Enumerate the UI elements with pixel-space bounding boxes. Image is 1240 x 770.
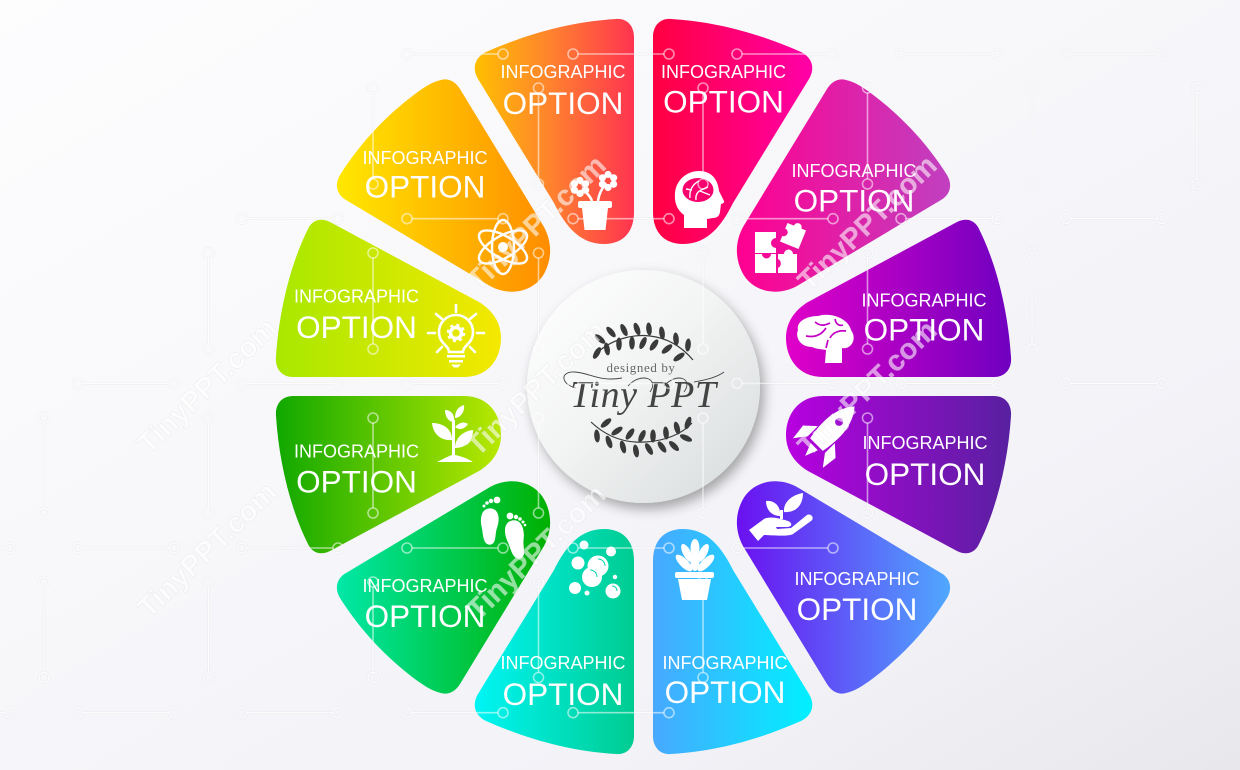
panel: yellow option segment xyxy=(337,79,550,292)
icon: bubbles xyxy=(569,540,620,598)
label: green segment: INFOGRAPHIC xyxy=(294,442,419,462)
label: green segment: OPTION xyxy=(296,464,417,500)
label: blue-violet segment: INFOGRAPHIC xyxy=(794,569,920,589)
panel: lime option segment xyxy=(276,220,501,377)
icon: atom xyxy=(474,220,532,274)
icon: light bulb with gear xyxy=(428,305,484,368)
label: red segment: INFOGRAPHIC xyxy=(661,62,786,82)
label: red segment xyxy=(661,62,786,120)
watermarks: TinyPPT.com xyxy=(461,315,613,463)
icon: head with brain xyxy=(675,171,724,228)
panel: sky blue option segment xyxy=(653,529,812,754)
watermarks: TinyPPT.com xyxy=(461,479,613,627)
label: lime segment: INFOGRAPHIC xyxy=(294,287,419,307)
icon: rocket xyxy=(789,390,871,472)
label: blue-violet segment: OPTION xyxy=(797,591,917,627)
panel: orange option segment xyxy=(475,19,634,244)
label: violet segment: OPTION xyxy=(865,456,985,492)
label: green segment xyxy=(294,442,419,500)
label: purple segment: INFOGRAPHIC xyxy=(861,291,987,311)
label: sky blue segment: INFOGRAPHIC xyxy=(662,653,788,673)
label: emerald segment: OPTION xyxy=(365,598,485,634)
watermarks xyxy=(132,150,944,627)
icon: puzzle pieces xyxy=(755,219,808,273)
label: lime segment: OPTION xyxy=(296,309,417,345)
panel: centre logo disc xyxy=(527,270,760,503)
label: lime segment xyxy=(294,287,419,345)
label: purple segment xyxy=(861,291,987,348)
label: magenta segment: OPTION xyxy=(794,182,914,218)
icon: hand holding plant xyxy=(749,493,813,541)
panel: teal option segment xyxy=(475,529,634,754)
label: yellow segment: INFOGRAPHIC xyxy=(362,148,488,168)
panel: purple option segment xyxy=(786,220,1011,377)
watermarks: TinyPPT.com xyxy=(792,315,944,463)
label: sky blue segment xyxy=(662,653,788,710)
icon: sprout xyxy=(432,405,473,462)
label: red segment: OPTION xyxy=(663,84,784,120)
watermarks: TinyPPT.com xyxy=(132,477,284,625)
label: purple segment: OPTION xyxy=(864,312,984,348)
label: magenta segment: INFOGRAPHIC xyxy=(791,161,917,181)
watermarks: TinyPPT.com xyxy=(792,150,944,298)
label: emerald segment: INFOGRAPHIC xyxy=(362,576,488,596)
panel: emerald option segment xyxy=(337,481,550,694)
label: emerald segment xyxy=(362,576,488,634)
label: blue-violet segment xyxy=(794,569,920,627)
label: violet segment: INFOGRAPHIC xyxy=(862,433,988,453)
icon: succulent in pot xyxy=(673,539,717,600)
label: teal segment: OPTION xyxy=(503,676,623,712)
panel: blue-violet option segment xyxy=(737,481,950,694)
icon: flower pot xyxy=(571,171,617,230)
label: teal segment: INFOGRAPHIC xyxy=(500,653,626,673)
label: orange segment xyxy=(500,62,626,121)
label: orange segment: OPTION xyxy=(503,85,623,121)
panel: violet option segment xyxy=(786,390,1011,553)
watermarks: TinyPPT.com xyxy=(461,150,613,298)
icon: footprints xyxy=(481,497,529,561)
label: magenta segment xyxy=(791,161,917,218)
icon: brain xyxy=(797,315,854,363)
panel: magenta option segment xyxy=(737,79,950,292)
label: orange segment: INFOGRAPHIC xyxy=(500,62,626,82)
label: yellow segment: OPTION xyxy=(365,169,485,205)
label: yellow segment xyxy=(362,148,488,205)
panel: green option segment xyxy=(276,396,501,553)
label: sky blue segment: OPTION xyxy=(665,674,785,710)
text: TinyPPT logotype: Tiny PPT xyxy=(570,374,719,416)
label: violet segment xyxy=(862,433,988,492)
icon: lower laurel wreath xyxy=(591,416,693,458)
label: teal segment xyxy=(500,653,626,712)
watermarks: TinyPPT.com xyxy=(132,313,284,461)
text: designed by: designed by xyxy=(606,360,676,375)
panel: red option segment xyxy=(653,19,812,244)
icon: upper laurel wreath xyxy=(591,322,693,363)
